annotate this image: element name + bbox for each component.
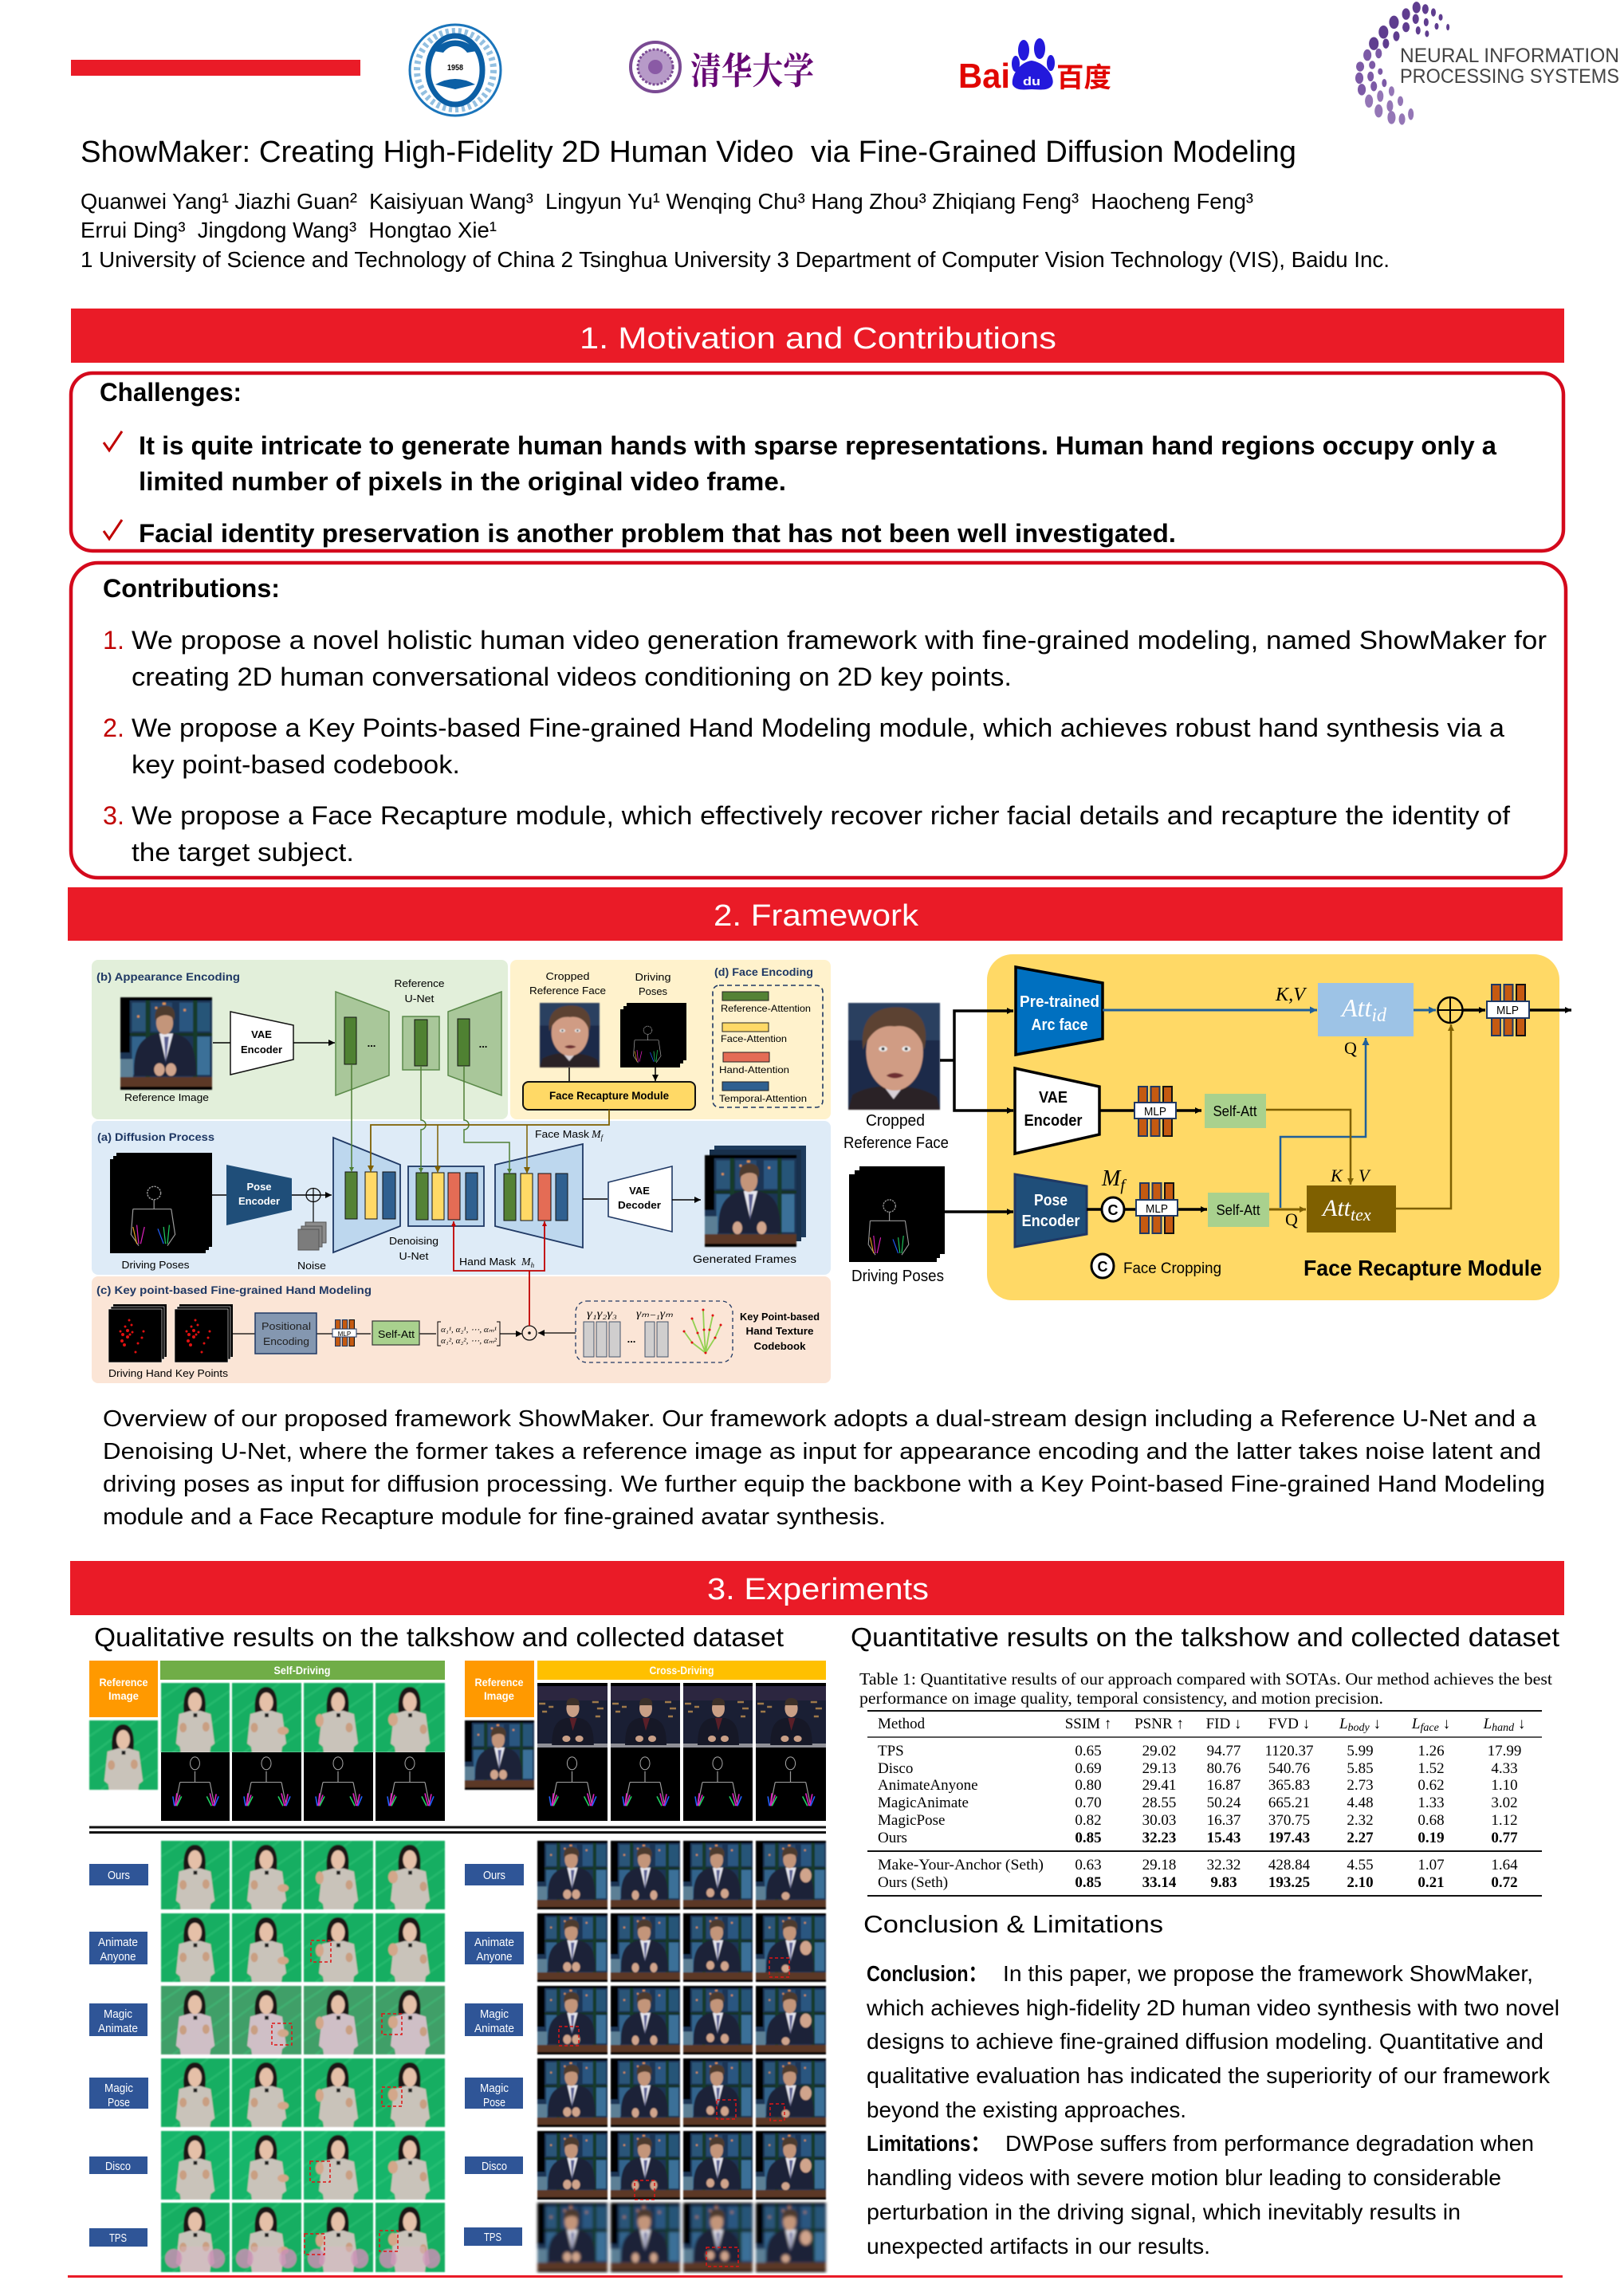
panel: challenges <box>71 373 1563 551</box>
panel: contributions: 2. <box>103 714 124 742</box>
text block: conclusion and limitations: unexpected artifacts in our results. <box>867 2234 1210 2259</box>
table header: hand <box>1492 1722 1515 1734</box>
table row: MagicPose: 30.03 <box>1142 1812 1176 1829</box>
method labels left: Magic <box>104 2082 133 2095</box>
panel: diffusion process: Denoising <box>389 1235 438 1247</box>
panel: contributions: We propose a Key Points-based Fine-grained Hand Modeling module, which achieves robust hand synthesis via a <box>132 714 1504 742</box>
table row: Make-Your-Anchor: 32.32 <box>1207 1857 1241 1873</box>
table row: Ours <box>878 1830 1518 1846</box>
text block: conclusion and limitations: designs to achieve fine-grained diffusion modeling. Quantitative and <box>867 2029 1543 2054</box>
table row: AnimateAnyone: 365.83 <box>1268 1777 1310 1794</box>
panel: diffusion process: f <box>601 1134 604 1142</box>
method labels right: Animate <box>474 1936 514 1949</box>
panel: challenges: limited number of pixels in the original video frame. <box>139 467 786 496</box>
cross-driving driving row <box>537 1683 826 1821</box>
table row: AnimateAnyone: 0.80 <box>1075 1777 1102 1794</box>
math labels: Q <box>1344 1038 1357 1058</box>
logo: Tsinghua University: 清华大学 <box>690 42 814 95</box>
panel: appearance encoding: (b) Appearance Encoding <box>96 970 240 983</box>
table row: MagicAnimate: 3.02 <box>1491 1795 1518 1811</box>
table row: Ours: Ours <box>878 1830 907 1846</box>
panel: contributions: We propose a novel holistic human video generation framework with fine-grained modeling, named ShowMaker for <box>132 626 1547 655</box>
table header: face <box>1421 1722 1439 1734</box>
table row: Ours: 32.23 <box>1142 1830 1176 1846</box>
self-driving header: Self-Driving <box>274 1664 330 1677</box>
method labels left: TPS <box>109 2231 127 2245</box>
method labels right: Animate <box>474 2022 514 2035</box>
table row: AnimateAnyone: 16.87 <box>1207 1777 1241 1794</box>
fusion and crop operators <box>1102 997 1463 1221</box>
encoders: VAE <box>1039 1089 1068 1107</box>
table row: Ours Seth: 2.10 <box>1347 1874 1374 1891</box>
panel: hand modeling: γₘ₋₁γₘ <box>636 1308 673 1320</box>
table row: MagicAnimate: 665.21 <box>1268 1795 1310 1811</box>
text block: conclusion and limitations: perturbation in the driving signal, which inevitably results in <box>867 2200 1461 2224</box>
math labels: V <box>1359 1166 1371 1185</box>
table row: Ours: 15.43 <box>1207 1830 1241 1846</box>
text block: conclusion and limitations: DWPose suffers from performance degradation when <box>1005 2131 1534 2156</box>
table row: MagicAnimate: 0.70 <box>1075 1795 1102 1811</box>
panel background: module <box>987 954 1559 1300</box>
diagram: face recapture module: Reference Face <box>843 1134 949 1152</box>
panel: hand modeling <box>92 1276 831 1383</box>
panel: appearance encoding: Encoder <box>241 1044 282 1056</box>
self attention blocks: Self-Att <box>1217 1202 1260 1218</box>
authors: Errui Ding³ Jingdong Wang³ Hongtao Xie¹ <box>81 218 497 242</box>
MLP blocks: MLP <box>1146 1202 1168 1216</box>
section band: Framework <box>68 887 1563 941</box>
self-driving header: Reference <box>99 1676 148 1689</box>
panel: diffusion process: M <box>592 1129 601 1141</box>
table row: Ours: 197.43 <box>1268 1830 1310 1846</box>
brown arrows <box>1266 1024 1451 1209</box>
panel: appearance encoding: VAE <box>251 1028 272 1040</box>
text block: conclusion and limitations: which achieves high-fidelity 2D human video synthesis with two novel <box>866 1995 1559 2020</box>
method labels left <box>89 1864 148 2247</box>
panel: hand modeling: ... <box>627 1333 635 1345</box>
panel: hand modeling: Positional <box>261 1320 311 1332</box>
table row: Ours Seth: 0.85 <box>1075 1874 1102 1891</box>
panel: diffusion process: (a) Diffusion Process <box>97 1130 214 1143</box>
legend: face cropping: C <box>1097 1259 1108 1275</box>
legend: face cropping <box>1091 1254 1221 1278</box>
MLP blocks <box>1134 985 1529 1233</box>
module label: Face Recapture Module <box>1304 1256 1542 1280</box>
math labels: Q <box>1285 1209 1298 1229</box>
section band: Motivation and Contributions: 1. Motivation and Contributions <box>580 322 1056 356</box>
logo: Baidu: Bai <box>958 57 1010 96</box>
panel: hand modeling: α₁², α₂², ⋯, αₘ² <box>441 1337 497 1346</box>
authors <box>81 189 1390 272</box>
logo: Baidu: du <box>1023 75 1040 88</box>
fusion and crop operators: C <box>1108 1202 1118 1218</box>
table header: L <box>1412 1716 1421 1732</box>
table row: AnimateAnyone <box>878 1777 1518 1794</box>
table row: MagicPose: 370.75 <box>1268 1812 1310 1829</box>
table row: Disco: 5.85 <box>1347 1760 1374 1777</box>
method labels left: Ours <box>108 1869 130 1882</box>
table row: MagicPose: 0.82 <box>1075 1812 1102 1829</box>
self-driving driving row <box>161 1683 445 1821</box>
diagram: face recapture module: Driving Poses <box>851 1268 944 1285</box>
table header: ↓ <box>1370 1716 1381 1732</box>
table header: SSIM ↑ <box>1065 1716 1111 1732</box>
table row: AnimateAnyone: 1.10 <box>1491 1777 1518 1794</box>
black arrows <box>940 1010 1571 1212</box>
method labels left: Disco <box>105 2160 131 2173</box>
method labels right: Disco <box>482 2160 507 2173</box>
text block: conclusion and limitations <box>866 1961 1559 2259</box>
section band: Experiments <box>70 1561 1564 1615</box>
panel: diffusion process: Driving Poses <box>121 1259 190 1271</box>
MLP blocks: MLP <box>1144 1105 1166 1119</box>
table row: Ours Seth: 193.25 <box>1268 1874 1310 1891</box>
attention blocks: Att <box>1342 993 1371 1022</box>
panel: hand modeling: Key Point-based <box>740 1311 820 1323</box>
framework description: driving poses as input for diffusion processing. We further equip the backbone with a Key Point-based Fine-grained Hand Modeling <box>103 1472 1545 1497</box>
panel: diffusion process: Face Mask <box>535 1128 590 1140</box>
panel: diffusion process: h <box>531 1261 535 1269</box>
panel: diffusion process: Hand Mask <box>459 1256 517 1268</box>
table row: TPS: 0.65 <box>1075 1743 1102 1759</box>
self attention blocks <box>1205 1094 1269 1227</box>
table row: MagicPose <box>878 1812 1518 1829</box>
table row: MagicAnimate: 1.33 <box>1418 1795 1445 1811</box>
logo: USTC <box>410 25 501 116</box>
table caption: performance on image quality, temporal consistency, and motion precision. <box>859 1689 1383 1708</box>
cross-driving header <box>465 1661 826 1790</box>
cross-driving header: Image <box>484 1689 514 1702</box>
encoders: Encoder <box>1022 1213 1080 1230</box>
table header: body <box>1348 1722 1370 1734</box>
panel: appearance encoding: ... <box>479 1038 487 1050</box>
attention blocks <box>1307 983 1414 1233</box>
panel: face encoding: Reference Face <box>529 985 606 997</box>
title: ShowMaker: Creating High-Fidelity 2D Human Video via Fine-Grained Diffusion Modeling <box>81 136 1296 169</box>
panel: face encoding: Driving <box>635 971 671 983</box>
panel: contributions: 1. <box>103 626 124 655</box>
panel: appearance encoding: ... <box>368 1037 376 1049</box>
table row: TPS <box>878 1743 1521 1759</box>
table row: Ours: 0.19 <box>1418 1830 1445 1846</box>
table row: MagicPose: MagicPose <box>878 1812 945 1829</box>
framework description: Denoising U-Net, where the former takes a reference image as input for appearance encoding and the latter takes noise latent and <box>103 1439 1541 1464</box>
section band: Framework: 2. Framework <box>714 899 919 933</box>
table row: MagicPose: 0.68 <box>1418 1812 1445 1829</box>
table row: Ours Seth: 0.72 <box>1491 1874 1518 1891</box>
panel: hand modeling: (c) Key point-based Fine-grained Hand Modeling <box>96 1284 372 1296</box>
panel: face encoding: Cropped <box>545 970 590 982</box>
heading: qualitative results: Qualitative results on the talkshow and collected dataset <box>94 1622 784 1652</box>
artifact highlights <box>272 1940 789 2267</box>
panel: diffusion process: Generated Frames <box>693 1252 796 1265</box>
attention blocks: tex <box>1351 1205 1371 1225</box>
panel: appearance encoding: Reference <box>394 977 445 989</box>
math labels: M <box>1102 1166 1120 1191</box>
authors: Quanwei Yang¹ Jiazhi Guan² Kaisiyuan Wang³ Lingyun Yu¹ Wenqing Chu³ Hang Zhou³ Zhiqiang Feng³ Haocheng Feng³ <box>81 189 1253 214</box>
logo: USTC: 1958 <box>447 64 463 73</box>
panel: contributions <box>71 563 1566 878</box>
panel: appearance encoding <box>92 960 508 1119</box>
panel: hand modeling: Driving Hand Key Points <box>108 1367 229 1379</box>
text block: conclusion and limitations: beyond the existing approaches. <box>867 2097 1186 2122</box>
table row: Ours Seth: 9.83 <box>1210 1874 1237 1891</box>
panel: contributions: creating 2D human conversational videos conditioning on 2D key points. <box>132 662 1012 691</box>
method labels left: Magic <box>104 2007 132 2021</box>
legend: face cropping: Face Cropping <box>1123 1260 1221 1277</box>
method labels right: Magic <box>480 2082 509 2095</box>
image: driving poses <box>849 1174 937 1262</box>
table row: Make-Your-Anchor: 428.84 <box>1268 1857 1311 1873</box>
cross-driving header: Cross-Driving <box>649 1664 714 1677</box>
self-driving header <box>89 1661 445 1790</box>
self-driving results grid <box>161 1841 445 2272</box>
table row: Make-Your-Anchor: 1.07 <box>1418 1857 1445 1873</box>
panel: diffusion process: Pose <box>246 1181 272 1193</box>
table row: Disco: 29.13 <box>1142 1760 1176 1777</box>
table row: AnimateAnyone: 29.41 <box>1142 1777 1176 1794</box>
table row: Ours Seth: Ours (Seth) <box>878 1874 948 1891</box>
table row: Disco: 540.76 <box>1268 1760 1310 1777</box>
table row: TPS: 29.02 <box>1142 1743 1176 1759</box>
table row: Ours: 0.77 <box>1491 1830 1518 1846</box>
math labels: K,V <box>1275 985 1307 1005</box>
panel: diffusion process: Encoder <box>238 1195 280 1207</box>
panel: diffusion process: VAE <box>629 1185 650 1197</box>
table caption <box>859 1669 1552 1708</box>
table caption: Table 1: Quantitative results of our approach compared with SOTAs. Our method achieves the best <box>859 1669 1552 1689</box>
heading: quantitative results: Quantitative results on the talkshow and collected dataset <box>851 1622 1559 1652</box>
panel: face encoding: Temporal-Attention <box>719 1093 807 1104</box>
text block: conclusion and limitations: Limitations： <box>867 2131 990 2156</box>
text block: conclusion and limitations: In this paper, we propose the framework ShowMaker, <box>1003 1961 1533 1986</box>
table row: Ours Seth: 0.21 <box>1418 1874 1445 1891</box>
table row: TPS: 94.77 <box>1207 1743 1241 1759</box>
self-driving header: Image <box>108 1689 139 1702</box>
panel: hand modeling: Self-Att <box>378 1328 415 1340</box>
panel: hand modeling: MLP <box>338 1331 351 1338</box>
panel: face encoding: Reference-Attention <box>721 1003 811 1014</box>
attention blocks: Att <box>1323 1195 1351 1221</box>
method labels right <box>464 1864 524 2246</box>
panel: face encoding: Face Recapture Module <box>549 1089 669 1102</box>
attention blocks: id <box>1371 1005 1387 1026</box>
panel: hand modeling: Encoding <box>263 1335 309 1347</box>
panel: face encoding: (d) Face Encoding <box>714 965 813 978</box>
panel: diffusion process: M <box>521 1256 531 1268</box>
framework description: module and a Face Recapture module for fine-grained avatar synthesis. <box>103 1504 886 1530</box>
table row: MagicAnimate: MagicAnimate <box>878 1795 969 1811</box>
table row: MagicAnimate: 4.48 <box>1347 1795 1374 1811</box>
encoders: Pose <box>1034 1192 1068 1209</box>
table row: Make-Your-Anchor <box>878 1857 1518 1873</box>
diagram: overall framework <box>92 960 831 1383</box>
table row: Make-Your-Anchor: 29.18 <box>1142 1857 1176 1873</box>
text block: conclusion and limitations: Conclusion： <box>867 1961 987 1986</box>
panel: contributions: the target subject. <box>132 838 354 867</box>
logo: Baidu <box>958 38 1111 96</box>
method labels right: Anyone <box>477 1950 512 1964</box>
cross-driving header: Reference <box>475 1676 524 1689</box>
table header: FID ↓ <box>1206 1716 1241 1732</box>
blue arrows <box>1103 1010 1436 1208</box>
table row: Ours Seth <box>878 1874 1518 1891</box>
table header <box>878 1716 1525 1734</box>
table row: AnimateAnyone: 0.62 <box>1418 1777 1445 1794</box>
panel: diffusion process: U-Net <box>399 1250 429 1262</box>
panel: appearance encoding: Reference Image <box>124 1091 209 1103</box>
table row: Disco: 4.33 <box>1491 1760 1518 1777</box>
table header: ↓ <box>1514 1716 1525 1732</box>
encoders: Pre-trained <box>1020 993 1099 1011</box>
encoders: Arc face <box>1032 1016 1087 1034</box>
math labels: K <box>1330 1166 1343 1185</box>
framework description <box>103 1406 1545 1530</box>
cross-driving results grid <box>537 1841 826 2272</box>
bottom rule <box>68 2275 1563 2278</box>
table row: Ours Seth: 33.14 <box>1142 1874 1177 1891</box>
table header: L <box>1339 1716 1348 1732</box>
section band: Experiments: 3. Experiments <box>707 1573 929 1606</box>
panel: diffusion process <box>92 1121 831 1275</box>
connectors between modules <box>352 1064 609 1326</box>
logo: NeurIPS <box>1355 2 1619 125</box>
panel: challenges: Facial identity preservation is another problem that has not been well investigated. <box>139 519 1176 548</box>
text block: conclusion and limitations: handling videos with severe motion blur leading to considerable <box>867 2165 1501 2190</box>
MLP blocks: MLP <box>1496 1004 1519 1017</box>
logo: NeurIPS: NEURAL INFORMATION <box>1400 45 1619 67</box>
panel: contributions: 3. <box>103 801 124 830</box>
table row: Disco: Disco <box>878 1760 913 1777</box>
method labels left: Animate <box>98 2022 138 2035</box>
table header: PSNR ↑ <box>1134 1716 1184 1732</box>
method labels right: Pose <box>483 2096 505 2109</box>
framework description: Overview of our proposed framework ShowMaker. Our framework adopts a dual-stream design including a Reference U-Net and a <box>103 1406 1537 1432</box>
table row: Ours: 2.27 <box>1347 1830 1374 1846</box>
image: cropped reference face <box>848 1003 940 1110</box>
table row: Make-Your-Anchor: 1.64 <box>1491 1857 1518 1873</box>
panel: challenges: Challenges: <box>100 378 242 407</box>
table row: AnimateAnyone: AnimateAnyone <box>878 1777 978 1794</box>
table row: Disco: 80.76 <box>1207 1760 1241 1777</box>
panel: diffusion process: Decoder <box>618 1199 661 1211</box>
panel: face encoding: Hand-Attention <box>719 1064 789 1075</box>
method labels right: TPS <box>484 2231 501 2244</box>
table row: Ours: 0.85 <box>1075 1830 1102 1846</box>
panel: challenges: It is quite intricate to generate human hands with sparse representations. Human hand regions occupy only a <box>139 431 1496 460</box>
panel: appearance encoding: U-Net <box>405 993 435 1005</box>
encoders <box>1015 967 1103 1247</box>
table row: MagicAnimate: 28.55 <box>1142 1795 1176 1811</box>
table header: L <box>1484 1716 1492 1732</box>
panel: diffusion process: Noise <box>297 1260 326 1272</box>
panel: face encoding <box>510 960 831 1119</box>
panel: face encoding: Poses <box>639 985 667 997</box>
method labels right: Magic <box>480 2007 509 2021</box>
method labels left: Anyone <box>100 1950 136 1964</box>
table row: Make-Your-Anchor: 0.63 <box>1075 1857 1102 1873</box>
table row: MagicAnimate: 50.24 <box>1207 1795 1241 1811</box>
top red accent bar <box>71 60 360 76</box>
panel: hand modeling: γ₁γ₂γ₃ <box>587 1308 617 1320</box>
panel: face encoding: Face-Attention <box>721 1033 787 1044</box>
table row: MagicAnimate <box>878 1795 1518 1811</box>
table row: MagicPose: 16.37 <box>1207 1812 1241 1829</box>
table row: TPS: 1120.37 <box>1264 1743 1314 1759</box>
table row: Disco <box>878 1760 1518 1777</box>
diagram: face recapture module <box>843 954 1571 1300</box>
table header: Method <box>878 1716 926 1732</box>
method labels right: Ours <box>483 1869 505 1882</box>
panel: hand modeling: Hand Texture <box>746 1325 813 1337</box>
math labels: f <box>1120 1177 1127 1194</box>
table row: TPS: 1.26 <box>1418 1743 1445 1759</box>
table row: AnimateAnyone: 2.73 <box>1347 1777 1374 1794</box>
table row: MagicPose: 1.12 <box>1491 1812 1518 1829</box>
self attention blocks: Self-Att <box>1213 1103 1256 1119</box>
section band: Motivation and Contributions <box>71 309 1564 363</box>
panel: contributions: We propose a Face Recapture module, which effectively recover richer facial details and recapture the identity of <box>132 801 1510 830</box>
panel: contributions: key point-based codebook. <box>132 750 460 779</box>
logo: Tsinghua University <box>631 42 814 95</box>
table: quantitative results <box>859 1669 1552 1896</box>
table row: Make-Your-Anchor: 4.55 <box>1347 1857 1374 1873</box>
math labels <box>1101 985 1371 1229</box>
diagram: face recapture module: Cropped <box>866 1112 925 1130</box>
table row: Disco: 0.69 <box>1075 1760 1102 1777</box>
encoders: Encoder <box>1024 1112 1083 1130</box>
method labels left: Pose <box>108 2096 130 2109</box>
text block: conclusion and limitations: qualitative evaluation has indicated the superiority of our framework <box>867 2063 1551 2088</box>
heading: conclusion and limitations: Conclusion & Limitations <box>863 1910 1163 1938</box>
authors: 1 University of Science and Technology of China 2 Tsinghua University 3 Department of Computer Vision Technology (VIS), Baidu Inc. <box>81 247 1390 272</box>
table header: ↓ <box>1439 1716 1450 1732</box>
table row: TPS: 5.99 <box>1347 1743 1374 1759</box>
table row: TPS: TPS <box>878 1743 904 1759</box>
panel: contributions: Contributions: <box>103 574 280 603</box>
table row: TPS: 17.99 <box>1488 1743 1521 1759</box>
table row: Disco: 1.52 <box>1418 1760 1445 1777</box>
panel: qualitative image grid <box>89 1661 826 2272</box>
panel: hand modeling: Codebook <box>754 1340 806 1352</box>
table header: FVD ↓ <box>1268 1716 1310 1732</box>
logo: Baidu: 百度 <box>1056 56 1111 95</box>
table row: MagicPose: 2.32 <box>1347 1812 1374 1829</box>
table row: Make-Your-Anchor: Make-Your-Anchor (Seth) <box>878 1857 1044 1873</box>
panel: hand modeling: α₁¹, α₂¹, ⋯, αₘ¹ <box>441 1326 497 1335</box>
method labels left: Animate <box>98 1936 138 1949</box>
